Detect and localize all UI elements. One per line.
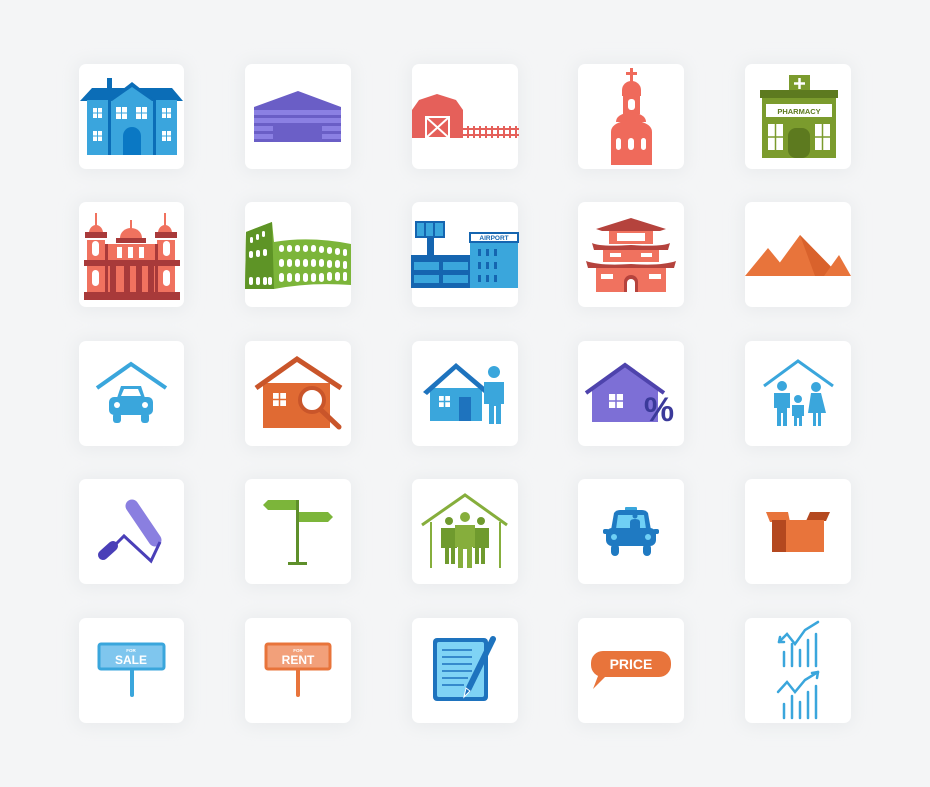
icon: family house xyxy=(764,361,833,426)
icon: house with magnifier xyxy=(256,359,341,428)
icon: signpost xyxy=(263,500,333,565)
icon: church xyxy=(611,68,652,165)
icon: house with man xyxy=(423,363,504,424)
icon: pharmacy: PHARMACY xyxy=(777,107,821,116)
icon: for sale sign xyxy=(99,644,164,697)
icon: document with pen xyxy=(433,638,493,701)
icon: for rent sign: RENT xyxy=(282,653,315,667)
icon: for sale sign: SALE xyxy=(115,653,147,667)
icon: for rent sign: FOR xyxy=(293,648,303,653)
icon: house with people xyxy=(422,495,507,568)
icon: airport xyxy=(411,222,519,288)
icon: warehouse xyxy=(254,91,341,142)
icon: price tag bubble xyxy=(591,651,671,689)
icon: paint roller xyxy=(103,506,160,561)
icon: house with percent: % xyxy=(644,391,674,429)
icon: taxi xyxy=(603,507,659,556)
icon: for sale sign: FOR xyxy=(126,648,136,653)
icon: house with percent xyxy=(586,365,674,429)
icon: barn with fence xyxy=(412,94,519,138)
icon: mansion xyxy=(80,78,183,155)
icon: pyramids xyxy=(745,235,851,276)
icon: garage with car xyxy=(97,364,166,423)
icon: box xyxy=(766,512,830,552)
icon: airport: AIRPORT xyxy=(479,235,509,242)
icon: for rent sign xyxy=(266,644,330,697)
icon: price tag bubble: PRICE xyxy=(610,656,652,672)
icon: palace xyxy=(84,213,180,300)
icon: colosseum xyxy=(245,222,351,289)
icon: pharmacy xyxy=(760,75,838,158)
icon: growth charts xyxy=(778,622,818,718)
icon: pagoda xyxy=(586,218,676,292)
